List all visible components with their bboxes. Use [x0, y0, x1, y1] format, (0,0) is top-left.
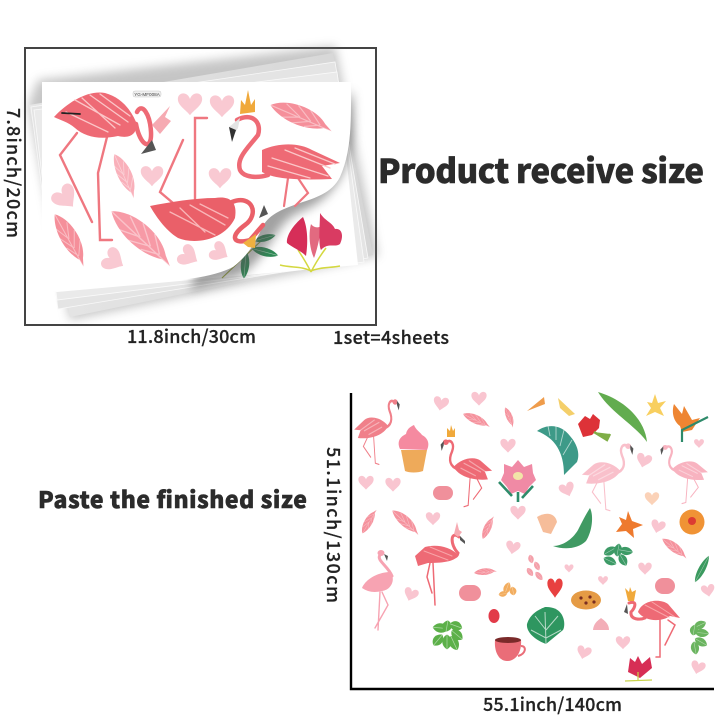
panel: product receive frame — [25, 48, 376, 325]
label: finished width: 55.1inch/140cm — [483, 691, 622, 717]
label: finished height: 51.1inch/130cm — [321, 447, 347, 603]
axis lines — [351, 393, 714, 689]
pink fern — [525, 554, 544, 582]
flamingo red lower middle — [415, 522, 465, 605]
meringue — [593, 618, 609, 630]
feathers — [359, 406, 690, 576]
protea flower — [499, 460, 536, 502]
orange leaves — [498, 581, 517, 597]
product code tag: YG-MF008A — [134, 92, 161, 97]
flamingo with crown — [229, 90, 340, 206]
bird of paradise — [673, 404, 708, 442]
macarons — [433, 486, 675, 601]
white under sheet — [42, 82, 358, 292]
back sheet 3 — [29, 53, 373, 317]
main curled sheet — [42, 82, 351, 288]
pink hearts on sheet — [49, 93, 234, 276]
palm leaf green — [430, 619, 465, 652]
heading: product receive size: Product receive size — [378, 145, 704, 193]
curl shadow — [190, 90, 353, 290]
orange flower — [680, 510, 704, 534]
label: set count: 1set=4sheets — [333, 324, 449, 350]
lily flower — [280, 213, 342, 272]
fern green — [553, 508, 592, 548]
hibiscus — [578, 414, 610, 440]
cupcake — [399, 425, 428, 472]
right green leaf — [692, 554, 712, 584]
monstera — [527, 607, 564, 644]
flamingos — [354, 399, 708, 511]
hearts — [358, 392, 716, 676]
small lily — [625, 656, 652, 681]
crowns — [447, 425, 636, 601]
label: sheet width: 11.8inch/30cm — [127, 323, 256, 349]
orange starfish — [616, 511, 643, 538]
flamingo pink lower left — [362, 550, 393, 630]
pink cup — [495, 637, 525, 661]
finished wall decals — [354, 392, 716, 681]
banana leaf — [598, 392, 647, 442]
teal palm leaf — [537, 425, 578, 475]
flamingo upside down — [150, 118, 268, 248]
label: sheet height: 7.8inch/20cm — [1, 108, 27, 238]
yellow star — [646, 394, 666, 416]
strawberry — [488, 609, 500, 623]
pink feathers on sheet — [48, 95, 336, 273]
back sheet 2 — [31, 62, 368, 309]
green leaves under curl — [222, 232, 279, 279]
flamingo left — [54, 93, 171, 240]
flamingo red lower right with crown — [624, 601, 680, 657]
cookie — [571, 590, 601, 610]
green clover — [602, 543, 634, 568]
shell and cone — [527, 397, 575, 534]
shadows behind the sheet stack — [28, 46, 378, 320]
fern right — [689, 619, 709, 655]
sticker sheets stack — [28, 46, 378, 320]
heading: paste the finished size: Paste the finished size — [38, 481, 307, 515]
back sheet 1 — [34, 72, 364, 300]
